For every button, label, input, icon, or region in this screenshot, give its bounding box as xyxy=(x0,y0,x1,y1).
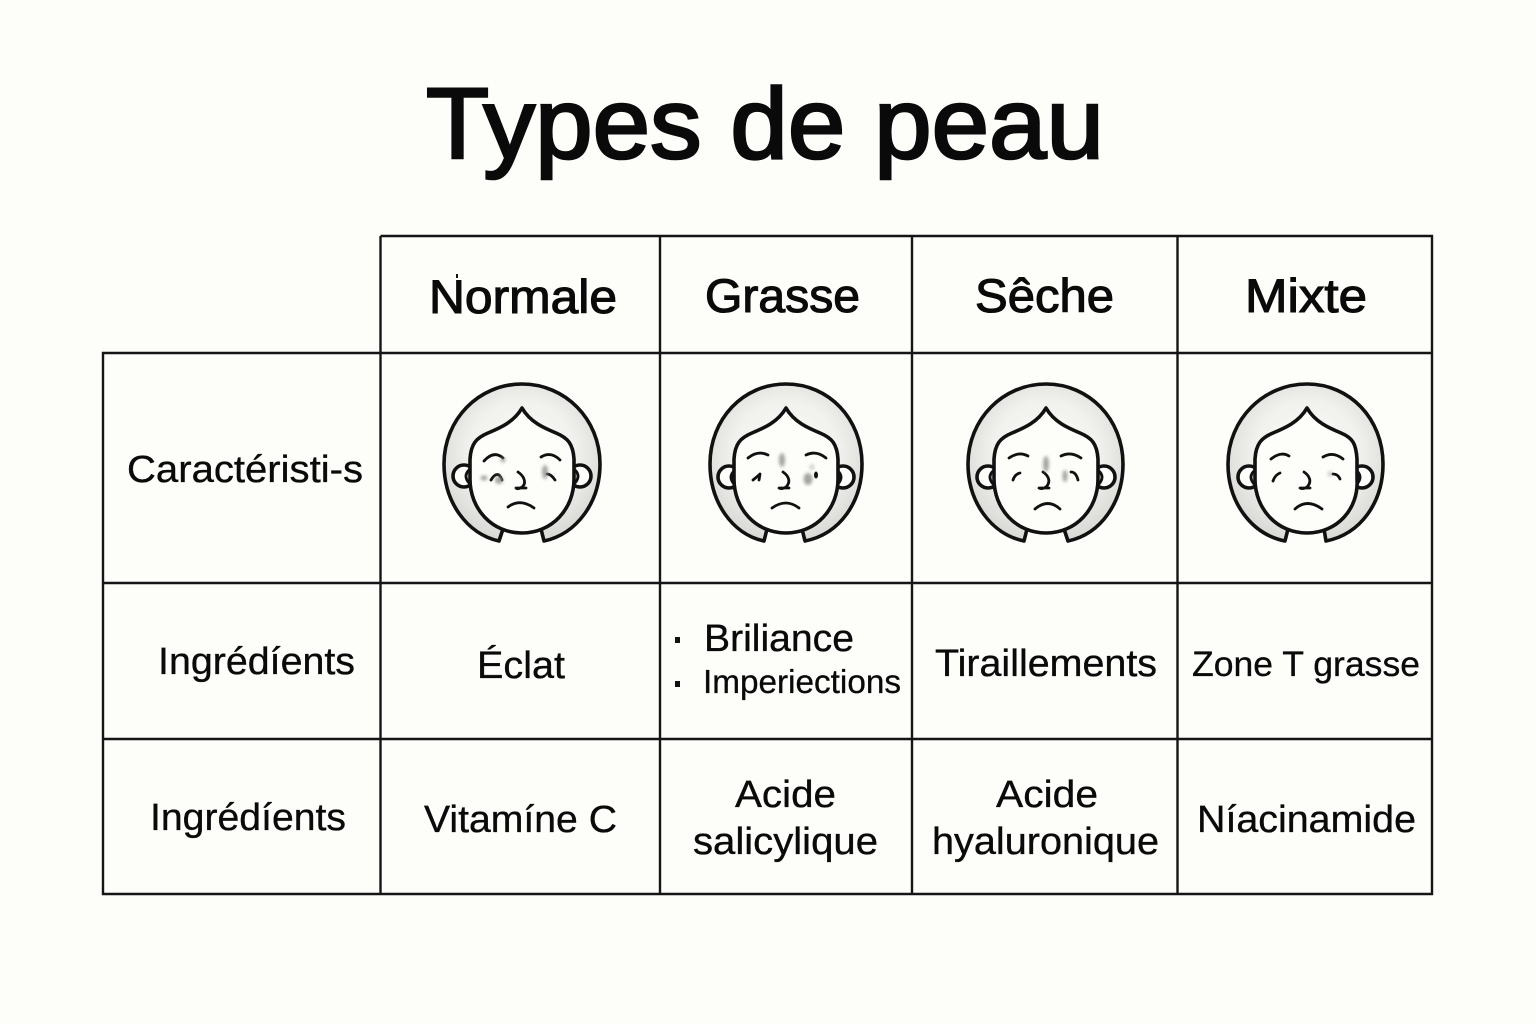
cell: Tiraillements: Tiraillements xyxy=(935,643,1157,685)
cell: Vitamine C: Vitamíne C xyxy=(424,799,617,841)
column header: Grasse: Grasse xyxy=(705,269,860,322)
row label: Ingrédients 1: Ingrédíents xyxy=(158,641,355,683)
cell: Niacinamide: Níacinamide xyxy=(1197,799,1416,841)
cell: Éclat: Éclat xyxy=(477,644,565,687)
title: Types de peau xyxy=(426,68,1104,180)
cell: Zone T grasse: Zone T grasse xyxy=(1192,645,1420,684)
cell: Acide hyaluronique: hyaluronique xyxy=(932,821,1159,863)
table grid xyxy=(103,236,1432,894)
column header: Sèche: Sêche xyxy=(975,269,1114,322)
row label: Ingrédients 2: Ingrédíents xyxy=(150,797,346,839)
cell: Acide salicylique: Acide xyxy=(735,774,836,816)
column header: Normale: Normale xyxy=(429,270,617,323)
icon: face normale xyxy=(444,384,600,541)
icon: face seche xyxy=(968,384,1123,541)
cell: Brillance and imperfections list xyxy=(675,618,901,700)
cell: Acide hyaluronique: Acide xyxy=(996,774,1098,816)
row label: Caractéristiques: Caractéristi-s xyxy=(127,449,363,491)
column header: Mixte: Mixte xyxy=(1245,269,1367,322)
cell: Brillance and imperfections list: Briliance xyxy=(704,618,854,660)
cell: Acide salicylique: salicylique xyxy=(693,821,878,863)
cell: Brillance and imperfections list: Imperiections xyxy=(703,663,901,700)
cell: Acide salicylique xyxy=(693,774,878,863)
icon: face grasse xyxy=(710,384,862,541)
icon: face mixte xyxy=(1228,384,1383,541)
cell: Acide hyaluronique xyxy=(932,774,1159,863)
